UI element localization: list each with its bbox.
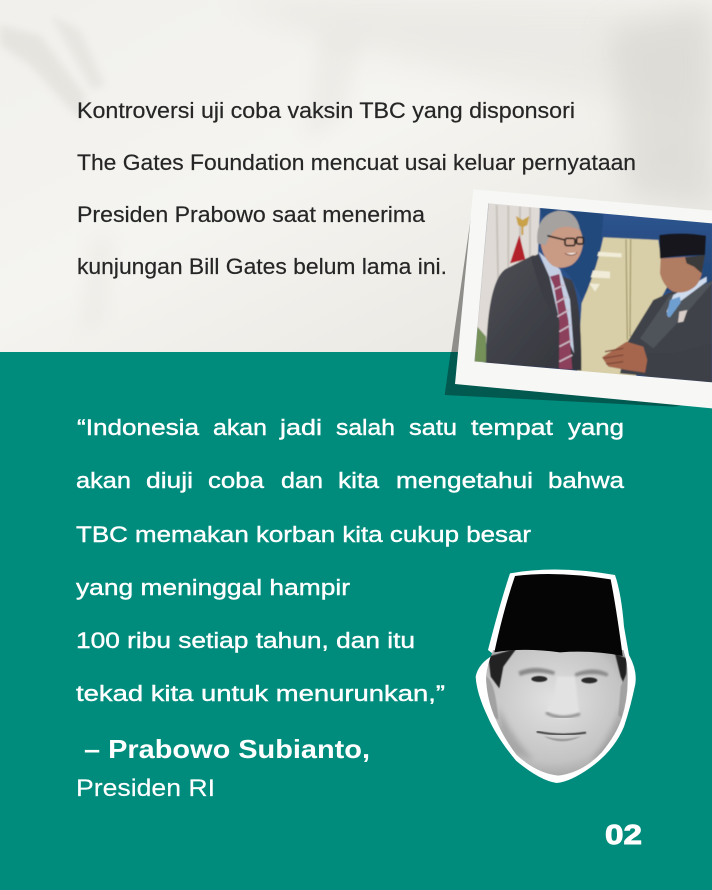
justified quote line 2 <box>76 468 625 493</box>
Prabowo sleeve <box>645 375 708 382</box>
intro text block <box>77 98 636 279</box>
justified quote line 2: mengetahui <box>396 468 533 493</box>
quote text block: tekad kita untuk menurunkan,” <box>76 681 445 706</box>
intro text block: Kontroversi uji coba vaksin TBC yang disponsori <box>77 98 575 123</box>
page number: 02 <box>605 819 642 850</box>
photo white frame <box>455 189 712 408</box>
justified quote line 2: coba <box>208 468 265 493</box>
attribution name: – Prabowo Subianto, <box>84 734 370 764</box>
quote text block <box>76 415 625 706</box>
intro text block: The Gates Foundation mencuat usai keluar pernyataan <box>77 150 636 175</box>
photo: polaroid of Bill Gates and Prabowo <box>445 189 712 408</box>
Bill Gates lapel <box>532 254 542 269</box>
Prabowo suit <box>620 280 712 383</box>
eyes <box>531 676 547 682</box>
sticker white outline <box>476 570 636 783</box>
justified quote line 1: yang <box>568 415 624 440</box>
nose <box>557 676 578 714</box>
Bill Gates head <box>540 226 584 269</box>
panel: paper texture background <box>0 0 712 352</box>
justified quote line 2: diuji <box>146 468 193 493</box>
Bill Gates suit <box>486 255 581 371</box>
Bill Gates hair <box>537 211 580 245</box>
Prabowo shirt and tie <box>667 277 707 317</box>
mouth <box>537 732 586 734</box>
flag and ornament <box>510 235 525 263</box>
hair sides <box>488 648 627 688</box>
Prabowo head <box>660 256 702 293</box>
justified quote line 1: akan <box>213 415 267 440</box>
portrait sticker: Prabowo <box>476 570 636 783</box>
white curtain <box>473 203 540 367</box>
justified quote line 1: salah <box>336 415 395 440</box>
justified quote line 1 <box>77 415 624 440</box>
cream doors <box>577 237 667 377</box>
intro text block: Presiden Prabowo saat menerima <box>77 202 426 227</box>
Bill Gates tie <box>550 274 572 369</box>
panel: teal lower background <box>0 352 712 890</box>
quote text block: TBC memakan korban kita cukup besar <box>76 522 532 547</box>
Prabowo cap <box>659 233 706 258</box>
photo shadow on paper <box>451 217 471 352</box>
Prabowo hands <box>602 342 647 373</box>
justified quote line 1: satu <box>409 415 457 440</box>
justified quote line 2: akan <box>76 468 131 493</box>
justified quote line 1: “Indonesia <box>77 415 200 440</box>
attribution role: Presiden RI <box>76 775 215 802</box>
blue drape <box>539 208 603 300</box>
plant <box>474 327 487 363</box>
photograph scene <box>473 200 712 387</box>
justified quote line 2: bahwa <box>548 468 625 493</box>
justified quote line 2: dan <box>281 468 323 493</box>
face <box>486 650 628 776</box>
cheek shadows <box>498 707 623 760</box>
quote text block: yang meninggal hampir <box>76 575 351 600</box>
brows <box>518 668 608 677</box>
black cap <box>494 574 623 656</box>
Prabowo pin <box>678 310 687 323</box>
justified quote line 1: tempat <box>471 415 554 440</box>
photo shadow on teal <box>445 352 693 407</box>
intro text block: kunjungan Bill Gates belum lama ini. <box>77 254 447 279</box>
justified quote line 2: kita <box>338 468 380 493</box>
Bill Gates glasses <box>547 236 583 246</box>
ears <box>485 673 627 720</box>
quote text block: 100 ribu setiap tahun, dan itu <box>76 628 415 653</box>
Bill Gates shirt <box>538 252 574 353</box>
justified quote line 1: jadi <box>279 415 322 440</box>
